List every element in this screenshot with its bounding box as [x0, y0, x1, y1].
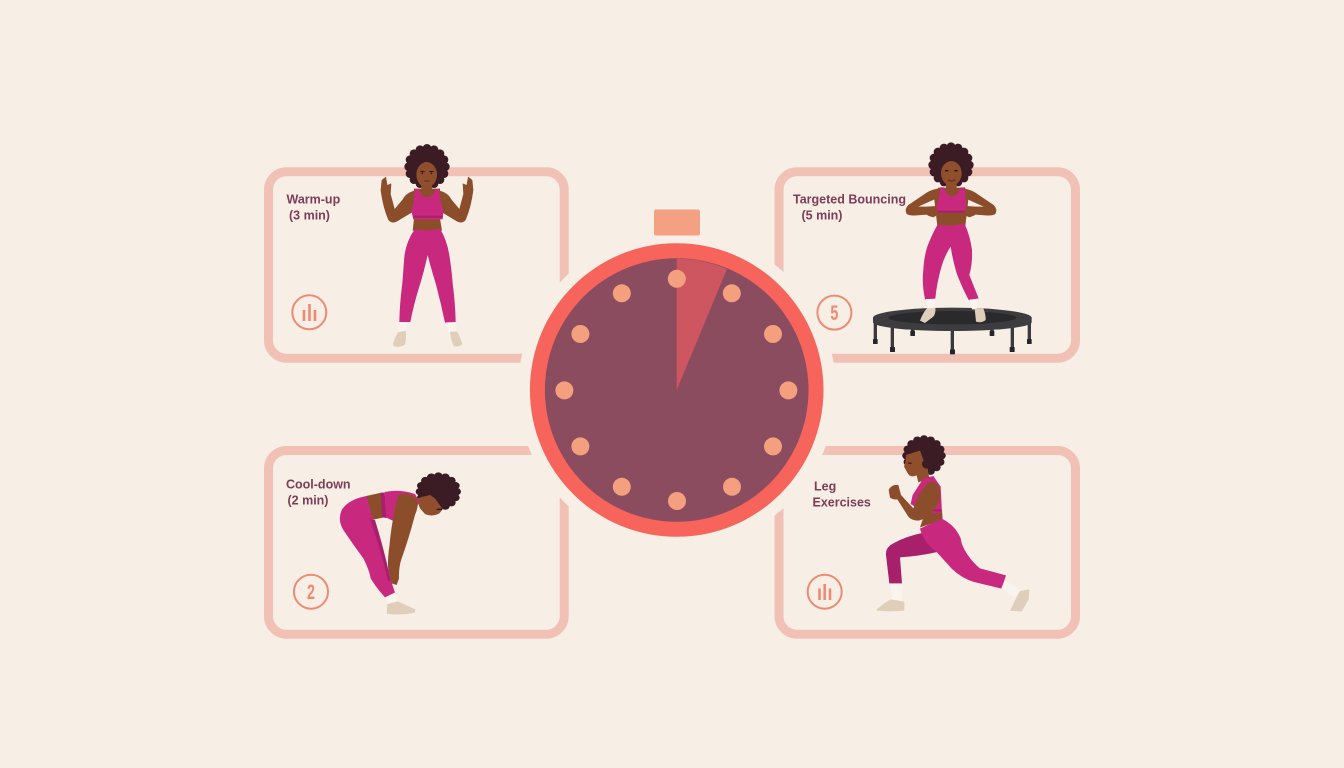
text: targeted bouncing label: (5 min) — [802, 208, 842, 222]
text: cool-down label: (2 min) — [288, 494, 328, 508]
text: targeted bouncing label — [793, 192, 906, 222]
figure: woman in lunge — [876, 435, 1029, 612]
icon: bars leg exercises — [808, 575, 842, 609]
icon: number 2 — [294, 575, 328, 609]
elapsed time wedge — [677, 259, 727, 390]
text: warm-up label — [286, 192, 341, 222]
panel: targeted bouncing frame — [779, 172, 1076, 358]
text: targeted bouncing label: Targeted Bouncing — [793, 192, 906, 206]
panel: cool-down frame — [268, 450, 564, 634]
icon: number 5: 5 — [830, 301, 838, 325]
stopwatch — [530, 210, 824, 537]
stopwatch button — [654, 210, 700, 236]
text: warm-up label: (3 min) — [289, 208, 330, 222]
stopwatch ring — [530, 243, 824, 537]
text: leg exercises label: Leg — [814, 480, 836, 494]
icon: bars warm-up — [292, 295, 326, 329]
figure: woman bouncing on trampoline — [873, 142, 1032, 354]
panel: warm-up frame — [268, 172, 564, 358]
trampoline — [873, 308, 1032, 354]
figure: warm-up standing woman — [381, 144, 473, 347]
icon: number 5 — [817, 296, 851, 330]
panel: leg exercises frame — [779, 450, 1076, 634]
stopwatch face — [545, 258, 808, 522]
text: leg exercises label — [812, 480, 871, 510]
text: cool-down label — [286, 478, 351, 508]
icon: number 2: 2 — [307, 580, 315, 604]
hour markers — [555, 270, 797, 510]
text: cool-down label: Cool-down — [286, 478, 351, 492]
figure: woman in forward bend — [340, 472, 461, 614]
text: warm-up label: Warm-up — [286, 192, 341, 206]
text: leg exercises label: Exercises — [812, 496, 871, 510]
